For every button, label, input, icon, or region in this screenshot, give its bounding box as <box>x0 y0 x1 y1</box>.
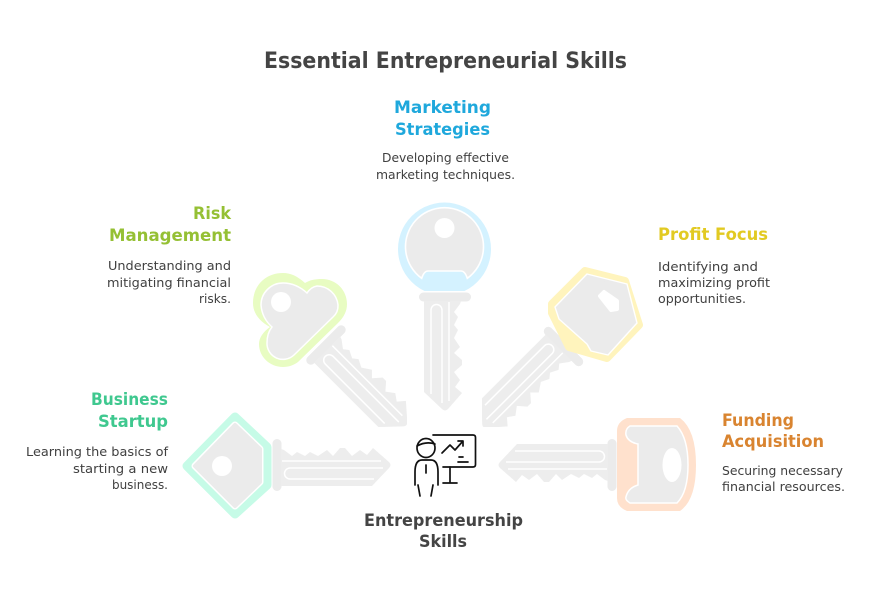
text: risk description: risks. <box>199 291 231 306</box>
heading: funding acquisition: Acquisition <box>722 432 824 452</box>
text: business description: Learning the basics of <box>26 444 169 459</box>
text: funding description: Securing necessary <box>722 463 844 478</box>
text: funding description <box>722 463 845 494</box>
heading: risk management: Management <box>109 226 231 246</box>
heading: business startup: Startup <box>98 412 168 432</box>
center label: entrepreneurship skills: Entrepreneurship <box>364 511 523 531</box>
heading: risk management: Risk <box>193 204 232 224</box>
text: business description: business. <box>112 477 168 492</box>
text: risk description: mitigating financial <box>107 275 231 290</box>
center label: entrepreneurship skills: Skills <box>419 532 467 552</box>
heading: business startup <box>91 390 168 432</box>
text: funding description: financial resources. <box>722 479 845 494</box>
text: profit description: maximizing profit <box>658 275 770 290</box>
key: business startup <box>187 417 390 514</box>
text: risk description <box>107 258 231 306</box>
center label: entrepreneurship skills <box>364 511 523 552</box>
text: profit description: opportunities. <box>658 291 746 306</box>
heading: marketing strategies: Strategies <box>395 120 490 140</box>
heading: funding acquisition: Funding <box>722 411 794 431</box>
key: risk management <box>253 273 407 427</box>
icon: presenter with chart board <box>415 435 476 496</box>
heading: marketing strategies <box>394 98 491 140</box>
heading: funding acquisition <box>722 411 824 452</box>
heading: risk management <box>109 204 232 246</box>
text: risk description: Understanding and <box>108 258 231 273</box>
key: funding acquisition <box>498 418 696 511</box>
text: marketing description: marketing techniques. <box>376 167 515 182</box>
text: business description: starting a new <box>73 461 168 476</box>
heading: marketing strategies: Marketing <box>394 98 491 118</box>
text: marketing description <box>376 150 515 182</box>
text: profit description: Identifying and <box>658 259 758 274</box>
heading: business startup: Business <box>91 390 168 410</box>
text: marketing description: Developing effective <box>382 150 509 165</box>
key: marketing strategies <box>398 203 491 410</box>
title: Essential Entrepreneurial Skills <box>264 49 627 74</box>
key: profit focus <box>482 267 643 427</box>
heading: profit focus: Profit Focus <box>658 225 768 245</box>
text: profit description <box>658 259 770 306</box>
text: business description <box>26 444 169 492</box>
